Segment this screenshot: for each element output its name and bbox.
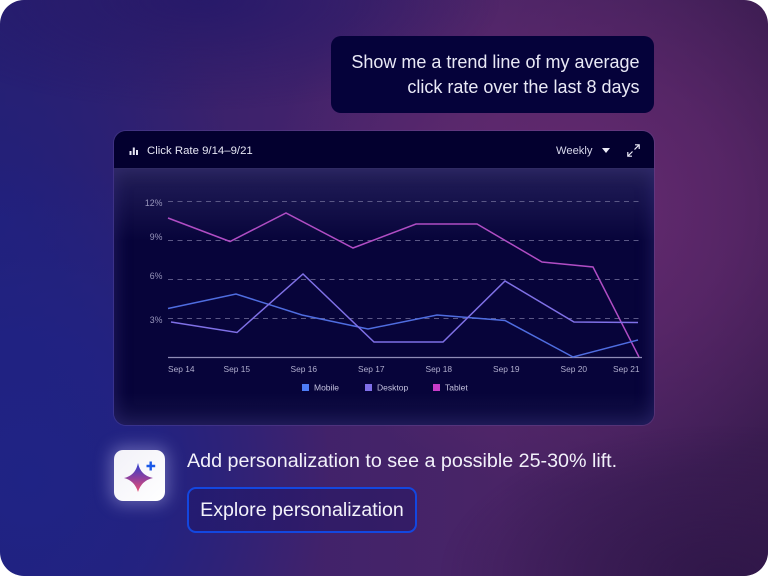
insight text: Add personalization to see a possible 25-30% lift. [187, 450, 617, 472]
y axis labels [145, 198, 163, 325]
icon: bar chart [130, 148, 138, 155]
x axis labels: Sep 15 [224, 364, 250, 374]
prompt bubble [331, 36, 654, 113]
x axis labels [168, 364, 640, 374]
x axis labels: Sep 18 [426, 364, 452, 374]
legend: mobile [302, 382, 339, 392]
prompt bubble: Show me a trend line of my average [351, 52, 640, 72]
line: tablet [168, 213, 639, 357]
x axis labels: Sep 14 [168, 364, 195, 374]
y axis labels: 3% [150, 315, 163, 325]
panel: click rate chart [114, 131, 654, 425]
y axis labels: 9% [150, 232, 163, 242]
y axis labels: 12% [145, 198, 163, 208]
legend: desktop: Desktop [377, 382, 408, 392]
x axis labels: Sep 16 [290, 364, 317, 374]
chart header [114, 131, 654, 169]
y axis labels: 6% [150, 271, 163, 281]
icon: expand [627, 144, 640, 157]
x axis labels: Sep 19 [493, 364, 520, 374]
legend: tablet: Tablet [445, 382, 468, 392]
period selector: Weekly [556, 145, 592, 157]
x axis labels: Sep 21 [613, 364, 640, 374]
chart title: Click Rate 9/14–9/21 [147, 145, 253, 157]
legend [302, 382, 468, 392]
icon: dropdown arrow [602, 148, 610, 153]
line: desktop [171, 274, 638, 342]
legend: mobile: Mobile [314, 382, 339, 392]
button: explore personalization: Explore personalization [200, 499, 404, 521]
button: explore personalization [187, 487, 417, 533]
legend: tablet [433, 382, 468, 392]
x axis labels: Sep 17 [358, 364, 385, 374]
icon: sparkle tile [114, 450, 165, 501]
line: mobile [168, 294, 638, 357]
prompt bubble: click rate over the last 8 days [407, 77, 640, 97]
x axis labels: Sep 20 [560, 364, 587, 374]
